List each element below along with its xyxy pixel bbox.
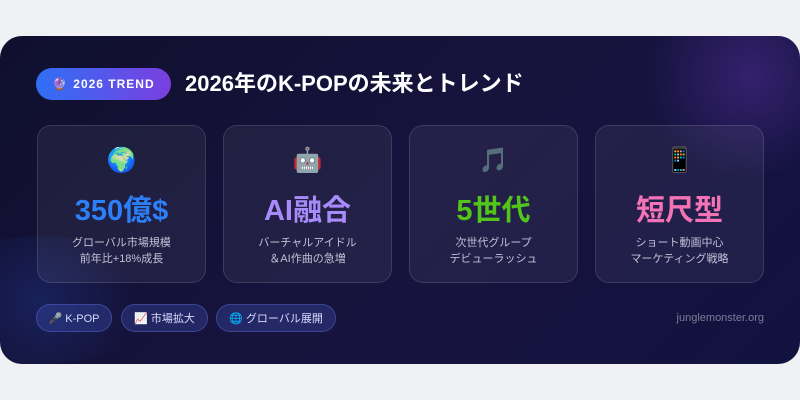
card: AI: ＆AI作曲の急増 bbox=[269, 253, 346, 265]
card: short form bbox=[595, 125, 764, 283]
card: 5th gen: 次世代グループ bbox=[455, 237, 532, 249]
tag: K-POP bbox=[36, 304, 112, 332]
card: short form: ショート動画中心 bbox=[636, 237, 724, 249]
tag: K-POP: 🎤 K-POP bbox=[48, 312, 99, 324]
card: market: 🌍 bbox=[107, 147, 136, 174]
card: AI: バーチャルアイドル bbox=[258, 237, 357, 249]
card: 5th gen bbox=[409, 125, 578, 283]
card: market: 前年比+18%成長 bbox=[80, 253, 163, 265]
card: AI: 🤖 bbox=[293, 147, 322, 174]
card: market: グローバル市場規模 bbox=[72, 237, 171, 249]
badge: 2026 trend bbox=[36, 68, 171, 100]
tag: global bbox=[216, 304, 336, 332]
tag: market expansion bbox=[121, 304, 208, 332]
card: 5th gen: 5世代 bbox=[456, 195, 531, 227]
card: AI: AI融合 bbox=[264, 195, 351, 227]
card: short form: 短尺型 bbox=[636, 195, 723, 227]
badge: 2026 trend: 🔮 bbox=[52, 77, 68, 91]
badge: 2026 trend: 2026 TREND bbox=[73, 77, 155, 91]
card: market: 350億$ bbox=[75, 195, 168, 227]
card: 5th gen: 🎵 bbox=[479, 147, 508, 174]
card: 5th gen: デビューラッシュ bbox=[450, 253, 538, 265]
card: short form: 📱 bbox=[665, 147, 694, 174]
title: 2026年のK-POPの未来とトレンド bbox=[185, 71, 524, 96]
tag: global: 🌐 グローバル展開 bbox=[229, 313, 323, 325]
card: market bbox=[37, 125, 206, 283]
source: junglemonster.org bbox=[677, 312, 764, 324]
card: AI bbox=[223, 125, 392, 283]
card: short form: マーケティング戦略 bbox=[630, 253, 729, 265]
tag: market expansion: 📈 市場拡大 bbox=[134, 313, 195, 325]
